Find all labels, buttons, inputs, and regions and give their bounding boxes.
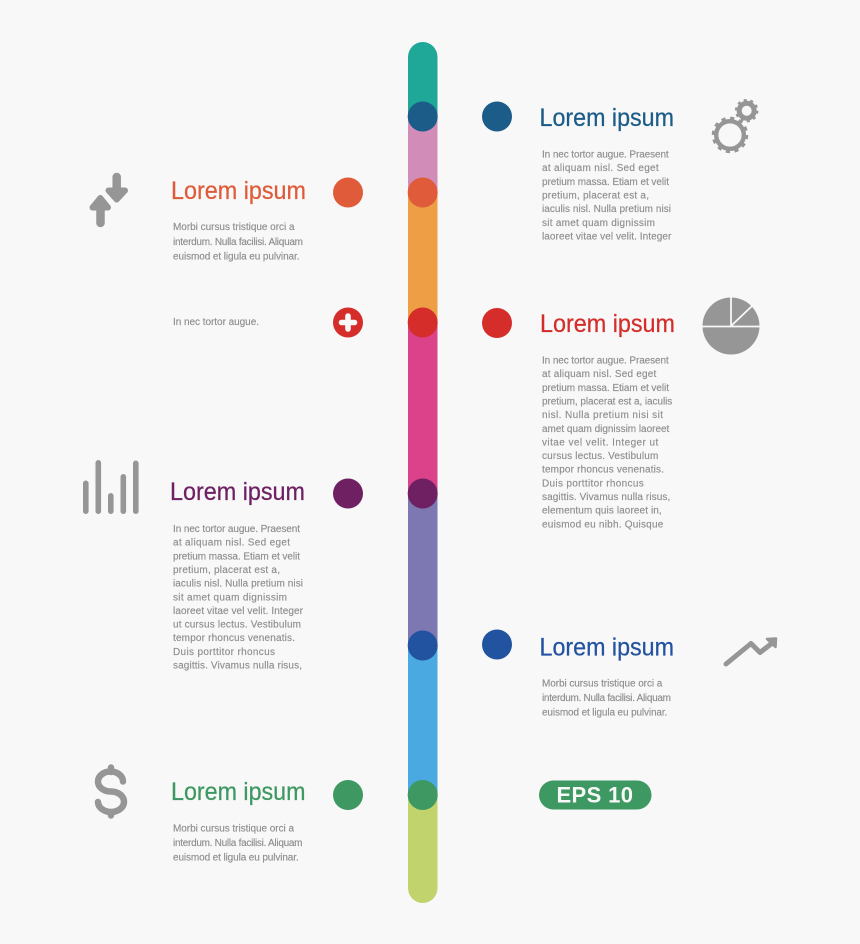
icon: opposing arrows: [92, 177, 125, 223]
text block: at aliquam nisl. Sed eget: [173, 538, 290, 549]
text block: Morbi cursus tristique orci a: [542, 678, 663, 690]
text block: In nec tortor augue. Praesent: [542, 150, 669, 160]
text block: interdum. Nulla facilisi. Aliquam: [173, 237, 303, 248]
icon: bar chart: [83, 460, 139, 514]
panel: right item 1: [482, 100, 757, 242]
text block: [542, 356, 672, 530]
text block: Duis porttitor rhoncus: [542, 478, 644, 489]
text block: sagittis. Vivamus nulla risus,: [173, 660, 302, 672]
text block: amet quam dignissim laoreet: [542, 424, 670, 435]
badge: EPS 10: [539, 780, 652, 810]
text block: laoreet vitae vel velit. Integer: [542, 231, 672, 242]
text block: euismod eu nibh. Quisque: [542, 519, 664, 530]
text block: Duis porttitor rhoncus: [173, 647, 275, 658]
text block: vitae vel velit. Integer ut: [542, 437, 659, 448]
text block: pretium massa. Etiam et velit: [173, 551, 300, 562]
panel: left item 3: [83, 460, 363, 672]
icon: plus dot: [333, 308, 363, 338]
text block: interdum. Nulla facilisi. Aliquam: [173, 838, 302, 849]
icon: gears: [714, 100, 757, 152]
text block: iaculis nisl. Nulla pretium nisi: [173, 579, 303, 590]
node dot: [333, 178, 363, 208]
central timeline bar: [408, 42, 438, 903]
text block: euismod et ligula eu pulvinar.: [173, 252, 300, 262]
badge: EPS 10: EPS 10: [556, 783, 633, 808]
text block: sagittis. Vivamus nulla risus,: [542, 492, 670, 503]
text block: [173, 824, 302, 864]
text block: In nec tortor augue.: [173, 317, 259, 328]
panel: right item 2: [482, 296, 760, 530]
text block: In nec tortor augue. Praesent: [542, 356, 669, 366]
node dot: [482, 630, 512, 660]
heading: Lorem ipsum: [171, 778, 306, 806]
text block: [173, 222, 303, 262]
text block: nisl. Nulla pretium nisi sit: [542, 410, 663, 421]
heading: Lorem ipsum: [540, 634, 674, 662]
text block: euismod et ligula eu pulvinar.: [173, 853, 299, 864]
text block: pretium, placerat est a,: [173, 565, 280, 576]
node dot: [482, 308, 512, 338]
text block: interdum. Nulla facilisi. Aliquam: [542, 693, 671, 704]
text block: pretium, placerat est a, iaculis: [542, 396, 672, 408]
heading: Lorem ipsum: [540, 104, 674, 132]
text block: Morbi cursus tristique orci a: [173, 824, 294, 834]
text block: ut cursus lectus. Vestibulum: [173, 620, 301, 631]
text block: pretium, placerat est a,: [542, 190, 649, 202]
panel: left item 4: [98, 768, 363, 864]
text block: sit amet quam dignissim: [542, 218, 655, 229]
heading: Lorem ipsum: [540, 310, 675, 338]
text block: [542, 150, 672, 242]
heading: Lorem ipsum: [171, 177, 306, 205]
text block: tempor rhoncus venenatis.: [542, 465, 664, 476]
node dot: [333, 780, 363, 810]
text block: tempor rhoncus venenatis.: [173, 633, 295, 644]
node dot: [333, 478, 363, 508]
text block: laoreet vitae vel velit. Integer: [173, 606, 304, 617]
icon: pie chart: [702, 296, 760, 354]
text block: sit amet quam dignissim: [173, 592, 287, 603]
text block: euismod et ligula eu pulvinar.: [542, 708, 667, 719]
text block: elementum quis laoreet in,: [542, 506, 662, 517]
panel: right item 3: [482, 630, 776, 719]
text block: Morbi cursus tristique orci a: [173, 222, 295, 233]
text block: [173, 524, 304, 672]
text block: In nec tortor augue. Praesent: [173, 524, 300, 535]
text block: cursus lectus. Vestibulum: [542, 451, 658, 462]
heading: Lorem ipsum: [170, 478, 305, 506]
text block: iaculis nisl. Nulla pretium nisi: [542, 204, 671, 215]
icon: trend arrow: [726, 638, 776, 664]
panel: left item 2: [173, 308, 363, 338]
text block: pretium massa. Etiam et velit: [542, 177, 669, 188]
node dot: [482, 102, 512, 132]
text block: at aliquam nisl. Sed eget: [542, 163, 659, 174]
panel: left item 1: [92, 177, 363, 262]
text block: pretium massa. Etiam et velit: [542, 383, 669, 394]
text block: [542, 678, 671, 719]
text block: at aliquam nisl. Sed eget: [542, 369, 657, 380]
icon: dollar sign: [98, 768, 124, 816]
